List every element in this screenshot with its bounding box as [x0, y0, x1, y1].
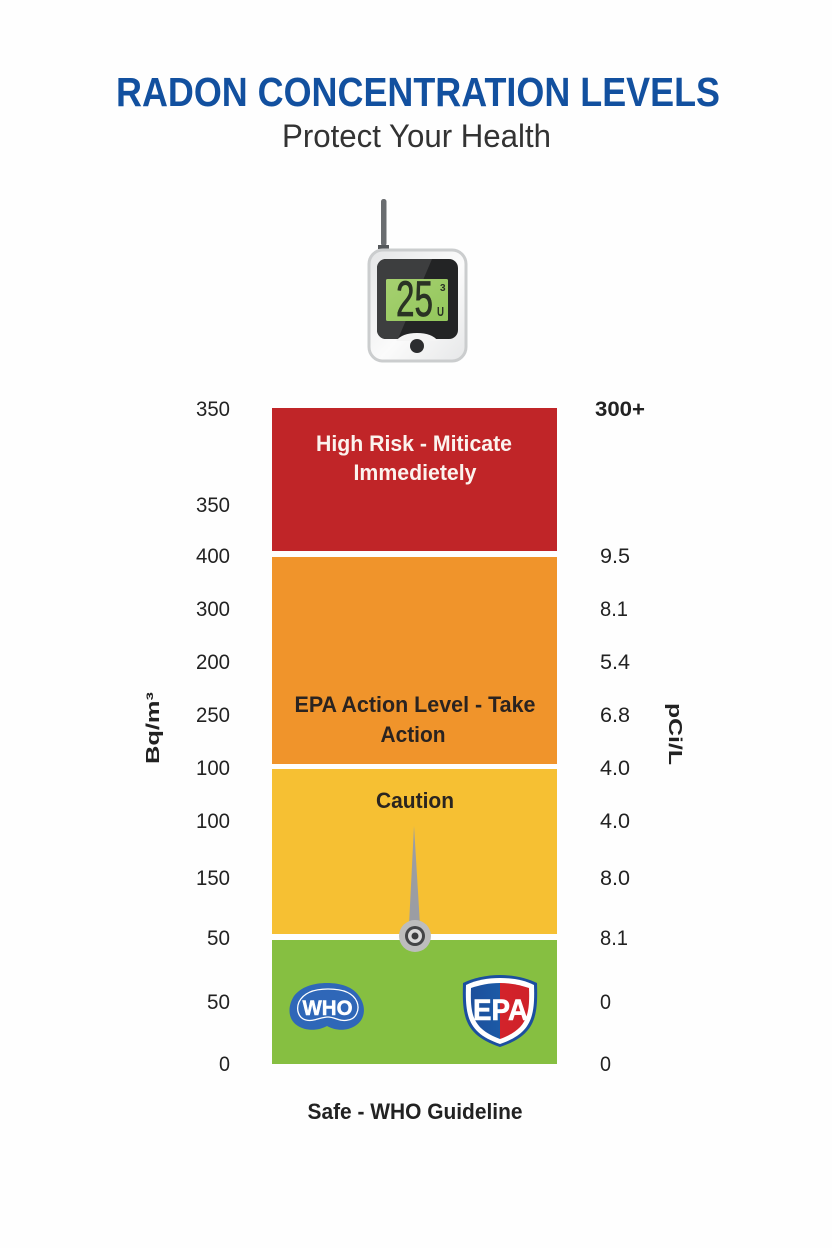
- label: EPA action level: [294, 692, 536, 747]
- panel: caution band: [272, 769, 557, 934]
- right scale: pCi/L values: 8.1: [600, 927, 628, 950]
- subtitle: Protect Your Health: [282, 118, 551, 154]
- left scale: Bq/m3 values: 400: [196, 545, 230, 568]
- logo: EPA: EPA: [473, 994, 528, 1027]
- right scale: pCi/L values: 8.0: [600, 867, 630, 890]
- label: safe WHO guideline: Safe - WHO Guideline: [308, 1099, 522, 1124]
- panel: high risk band: [272, 408, 557, 551]
- right axis label: pCi/L: [665, 703, 685, 765]
- logo: WHO: [289, 983, 364, 1030]
- right scale: pCi/L values: 9.5: [600, 545, 630, 568]
- label: high risk: High Risk - Miticate: [316, 431, 512, 456]
- label: EPA action level: Action: [380, 722, 446, 747]
- left scale: Bq/m3 values: 250: [196, 704, 230, 727]
- right scale: pCi/L values: 0: [600, 991, 611, 1014]
- title: RADON CONCENTRATION LEVELS: [116, 69, 720, 115]
- right scale: pCi/L values: 4.0: [600, 810, 630, 833]
- right scale: pCi/L values: 0: [600, 1053, 611, 1076]
- left scale: Bq/m3 values: [196, 398, 230, 1076]
- icon: radon detector device: [369, 199, 466, 361]
- icon: radon detector device: U: [437, 304, 444, 319]
- panel: safe band: [272, 940, 557, 1064]
- label: high risk: Immedietely: [354, 460, 477, 485]
- label: caution: Caution: [376, 788, 454, 813]
- label: EPA action level: EPA Action Level - Take: [294, 692, 536, 717]
- icon: radon detector device: 3: [440, 283, 446, 294]
- panel: EPA action band: [272, 557, 557, 764]
- left scale: Bq/m3 values: 50: [207, 927, 230, 950]
- left scale: Bq/m3 values: 350: [196, 494, 230, 517]
- left scale: Bq/m3 values: 0: [219, 1053, 230, 1076]
- right scale: pCi/L values: 6.8: [600, 704, 630, 727]
- left axis label: Bq/m³: [143, 692, 163, 764]
- left scale: Bq/m3 values: 350: [196, 398, 230, 421]
- label: high risk: [316, 431, 512, 485]
- left scale: Bq/m3 values: 200: [196, 651, 230, 674]
- right scale: pCi/L values: 4.0: [600, 757, 630, 780]
- gauge needle: [399, 826, 431, 952]
- right scale: pCi/L values: 5.4: [600, 651, 630, 674]
- logo: WHO: WHO: [302, 997, 352, 1020]
- right scale: pCi/L values: 300+: [595, 398, 645, 421]
- logo: EPA: [463, 975, 537, 1047]
- right scale: pCi/L values: [595, 398, 645, 1076]
- left scale: Bq/m3 values: 50: [207, 991, 230, 1014]
- left scale: Bq/m3 values: 100: [196, 757, 230, 780]
- icon: radon detector device: 25: [396, 271, 433, 327]
- left scale: Bq/m3 values: 100: [196, 810, 230, 833]
- right scale: pCi/L values: 8.1: [600, 598, 628, 621]
- left scale: Bq/m3 values: 300: [196, 598, 230, 621]
- left scale: Bq/m3 values: 150: [196, 867, 230, 890]
